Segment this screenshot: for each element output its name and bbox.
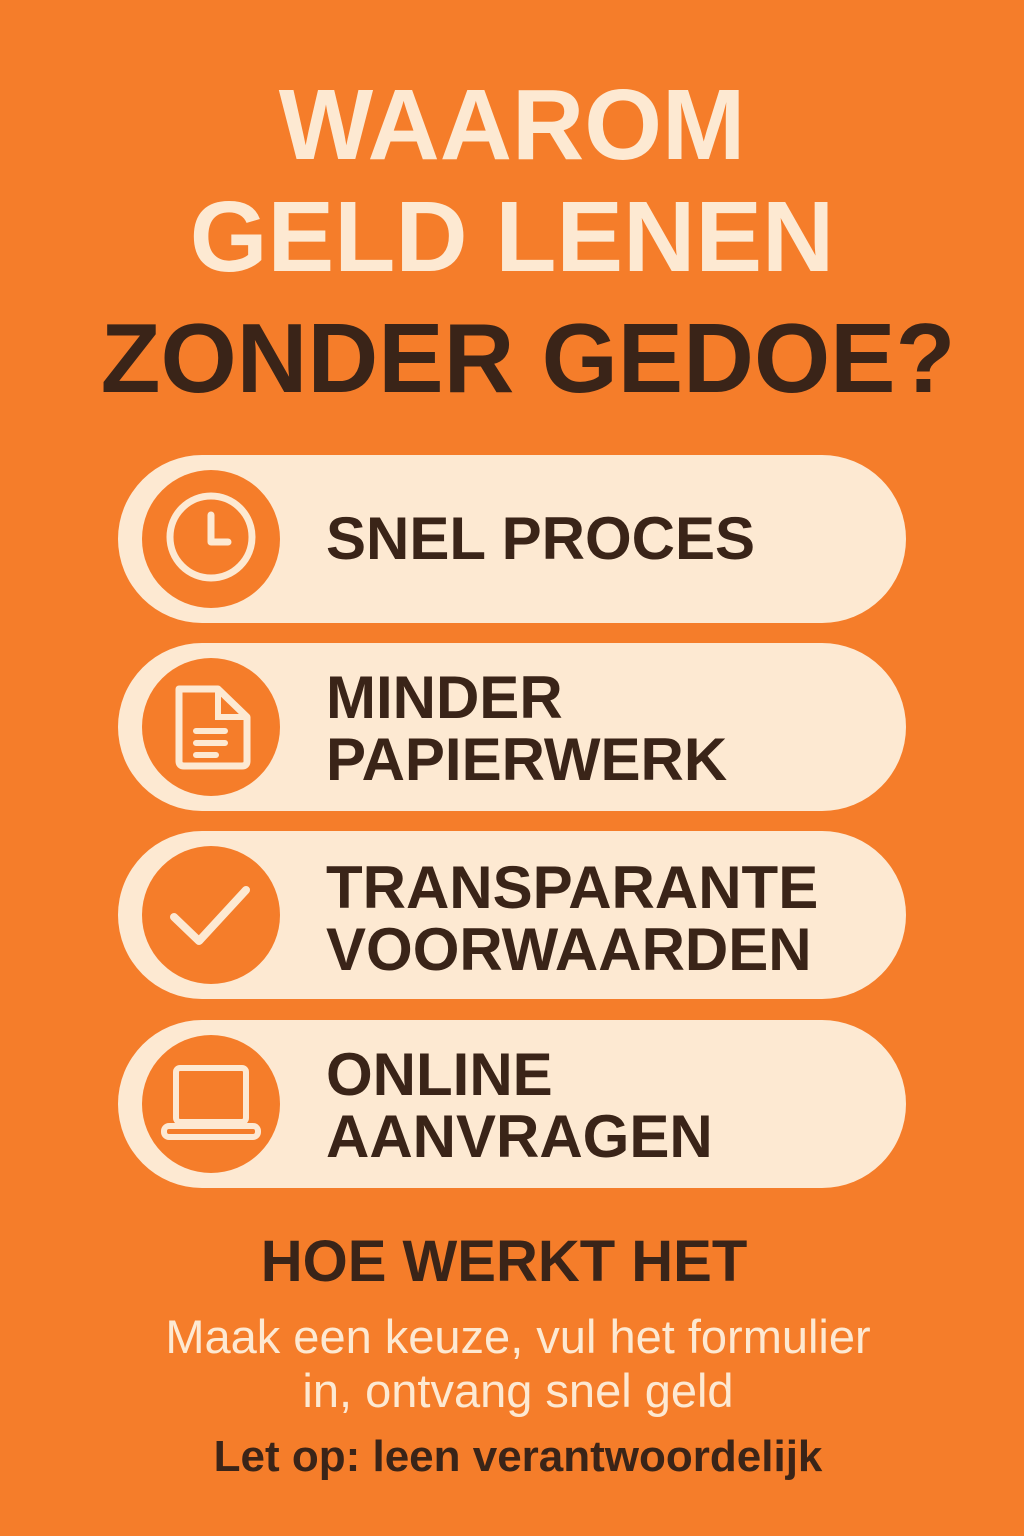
icon: check [142, 846, 280, 984]
label: AANVRAGEN [326, 1103, 713, 1170]
icon: clock [142, 470, 280, 608]
icon: laptop [142, 1035, 280, 1173]
label: ONLINE [326, 1041, 553, 1108]
text block: warning: Let op: leen verantwoordelijk [214, 1432, 822, 1481]
label [326, 854, 818, 983]
label [326, 664, 727, 793]
panel: transparante voorwaarden [118, 831, 906, 999]
title [101, 69, 955, 413]
text block: steps [165, 1310, 871, 1417]
panel: minder papierwerk [118, 643, 906, 811]
panel: snel proces [118, 455, 906, 623]
panel: online aanvragen [118, 1020, 906, 1188]
icon: document [142, 658, 280, 796]
heading: hoe werkt het: HOE WERKT HET [261, 1229, 747, 1294]
label: MINDER [326, 664, 563, 731]
label: SNEL PROCES [326, 505, 755, 572]
label: PAPIERWERK [326, 726, 727, 793]
title: ZONDER GEDOE? [101, 303, 955, 413]
label: VOORWAARDEN [326, 916, 812, 983]
text block: steps: in, ontvang snel geld [302, 1364, 734, 1417]
label [326, 1041, 713, 1170]
text block: steps: Maak een keuze, vul het formulier [165, 1310, 871, 1363]
label: TRANSPARANTE [326, 854, 818, 921]
title: WAAROM [279, 69, 745, 181]
title: GELD LENEN [190, 181, 834, 293]
